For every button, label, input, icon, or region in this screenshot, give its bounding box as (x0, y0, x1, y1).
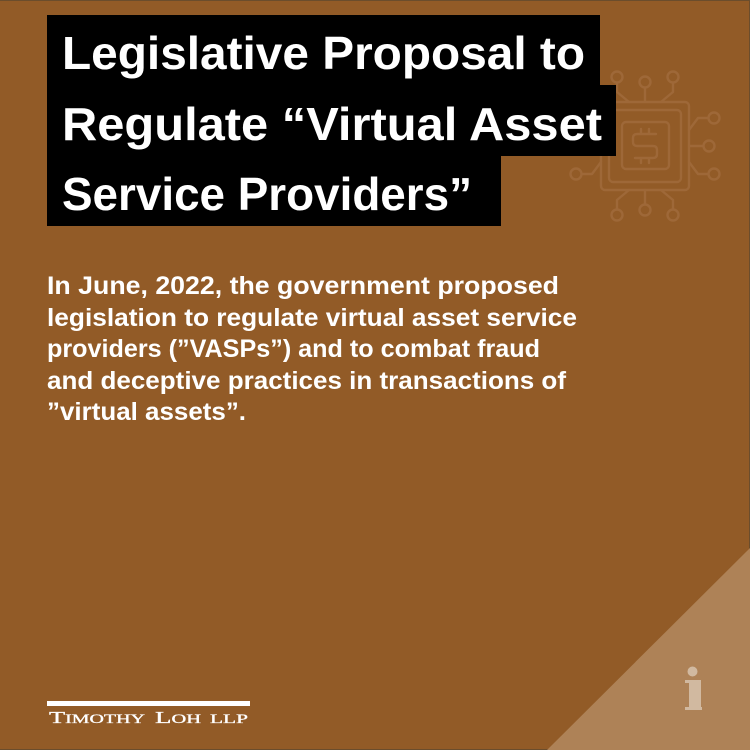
intro text block: ”virtual assets”. (47, 398, 246, 426)
logo: Timothy Loh LLP: LLP (210, 712, 248, 726)
corner triangle (547, 548, 750, 750)
icon: chip with dollar sign (570, 72, 720, 220)
title: Regulate “Virtual Asset (62, 98, 602, 150)
icon: information i (685, 666, 702, 710)
logo: Timothy Loh LLP (47, 701, 250, 727)
title (47, 15, 616, 226)
intro text block (47, 272, 577, 426)
title: Service Providers” (62, 168, 472, 220)
title: Legislative Proposal to (62, 27, 585, 79)
intro text block: and deceptive practices in transactions of (47, 367, 567, 395)
intro text block: providers (”VASPs”) and to combat fraud (47, 335, 540, 363)
intro text block: In June, 2022, the government proposed (47, 272, 559, 300)
logo: Timothy Loh LLP: L OH (155, 708, 201, 727)
intro text block: legislation to regulate virtual asset service (47, 304, 577, 332)
logo: Timothy Loh LLP: T IMOTHY (49, 708, 145, 727)
